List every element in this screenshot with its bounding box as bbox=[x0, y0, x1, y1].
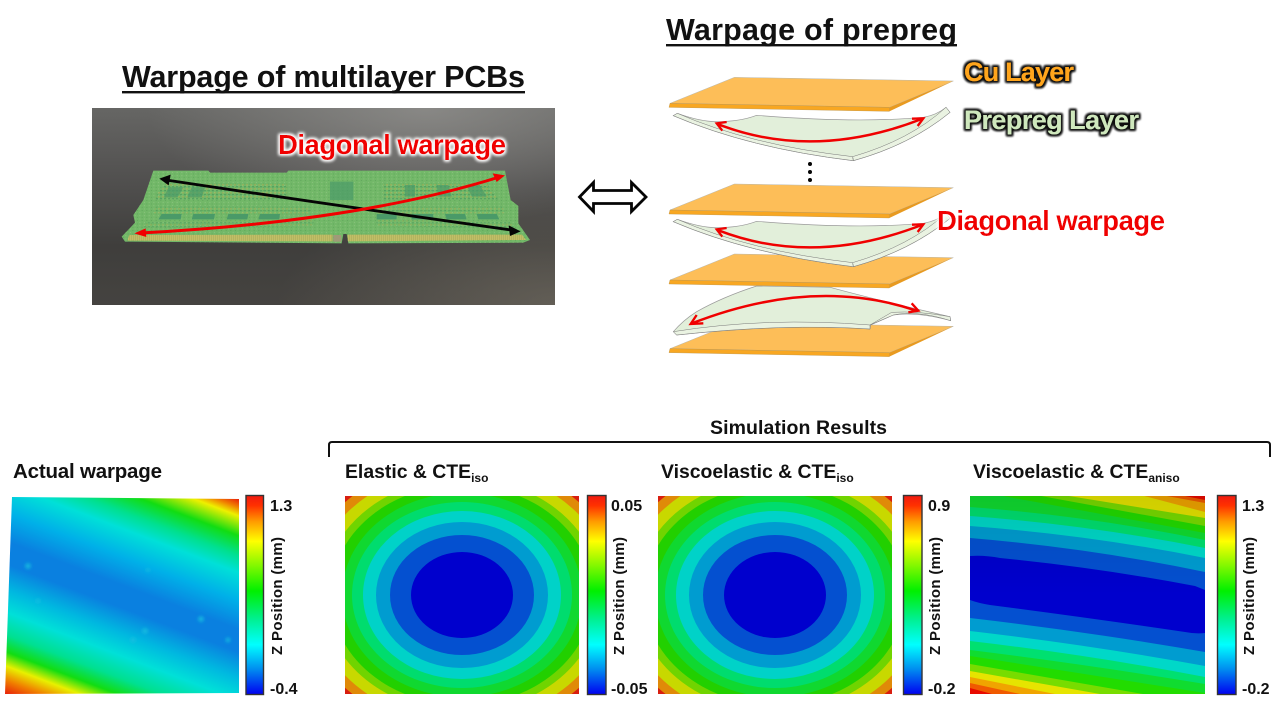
colorbar bbox=[904, 496, 922, 694]
heading: Viscoelastic & CTE bbox=[661, 461, 836, 483]
PCB module bbox=[120, 170, 533, 243]
heading: aniso bbox=[1148, 471, 1180, 485]
panel: elastic CTE iso bbox=[331, 461, 648, 705]
axis label: Z Position (mm) bbox=[611, 537, 628, 655]
title: warpage of multilayer PCBs: Warpage of multilayer PCBs bbox=[122, 60, 525, 94]
bracket bbox=[329, 442, 1270, 457]
label: diagonal warpage: Diagonal warpage bbox=[278, 129, 506, 160]
heading: Viscoelastic & CTE bbox=[973, 461, 1148, 483]
panel: viscoelastic CTE aniso bbox=[970, 450, 1270, 698]
Cu layer 3 bbox=[669, 254, 953, 288]
scale max: 1.3 bbox=[1242, 498, 1264, 515]
prepreg layer 2 bbox=[673, 213, 950, 267]
panel: viscoelastic CTE iso bbox=[644, 461, 956, 705]
layer stack illustration bbox=[669, 77, 953, 357]
axis label: Z Position (mm) bbox=[269, 537, 286, 655]
heatmap: concentric contours bbox=[345, 496, 579, 694]
ellipsis dots bbox=[808, 162, 812, 182]
scale min: -0.2 bbox=[1242, 681, 1270, 698]
colorbar bbox=[246, 496, 264, 694]
photo panel: PCB with diagonal warpage bbox=[92, 108, 555, 305]
panel: actual warpage bbox=[0, 460, 298, 700]
black arrow bbox=[159, 175, 521, 236]
heading: actual warpage: Actual warpage bbox=[13, 460, 162, 483]
Cu layer 2 bbox=[669, 184, 953, 218]
heading: Elastic & CTE bbox=[345, 461, 471, 483]
colorbar bbox=[1218, 496, 1236, 694]
colorbar bbox=[588, 496, 606, 694]
Cu layer 1 bbox=[669, 77, 953, 111]
label: diagonal warpage on stack: Diagonal warpage bbox=[937, 205, 1165, 236]
scale max: 1.3 bbox=[270, 498, 292, 515]
heatmap: actual bbox=[5, 497, 239, 694]
prepreg layer 1 bbox=[673, 107, 950, 161]
axis label: Z Position (mm) bbox=[1241, 537, 1258, 655]
scale min: -0.05 bbox=[611, 681, 648, 698]
Cu layer 4 bbox=[669, 323, 953, 357]
prepreg layer 3 bbox=[673, 286, 951, 335]
scale min: -0.2 bbox=[928, 681, 956, 698]
heatmap: sloped contours bbox=[970, 496, 1205, 694]
title: warpage of prepreg: Warpage of prepreg bbox=[666, 13, 957, 47]
heading: iso bbox=[471, 471, 488, 485]
scale max: 0.9 bbox=[928, 498, 950, 515]
legend label: Cu layer: Cu Layer bbox=[964, 57, 1074, 87]
scale min: -0.4 bbox=[270, 681, 298, 698]
axis label: Z Position (mm) bbox=[927, 537, 944, 655]
double-headed arrow bbox=[580, 182, 646, 212]
heading: simulation results: Simulation Results bbox=[710, 417, 887, 439]
legend label: prepreg layer: Prepreg Layer bbox=[964, 105, 1139, 135]
heading: iso bbox=[836, 471, 854, 485]
red arrow bbox=[134, 173, 505, 237]
scale max: 0.05 bbox=[611, 498, 642, 515]
heatmap: concentric contours bbox=[658, 496, 892, 694]
